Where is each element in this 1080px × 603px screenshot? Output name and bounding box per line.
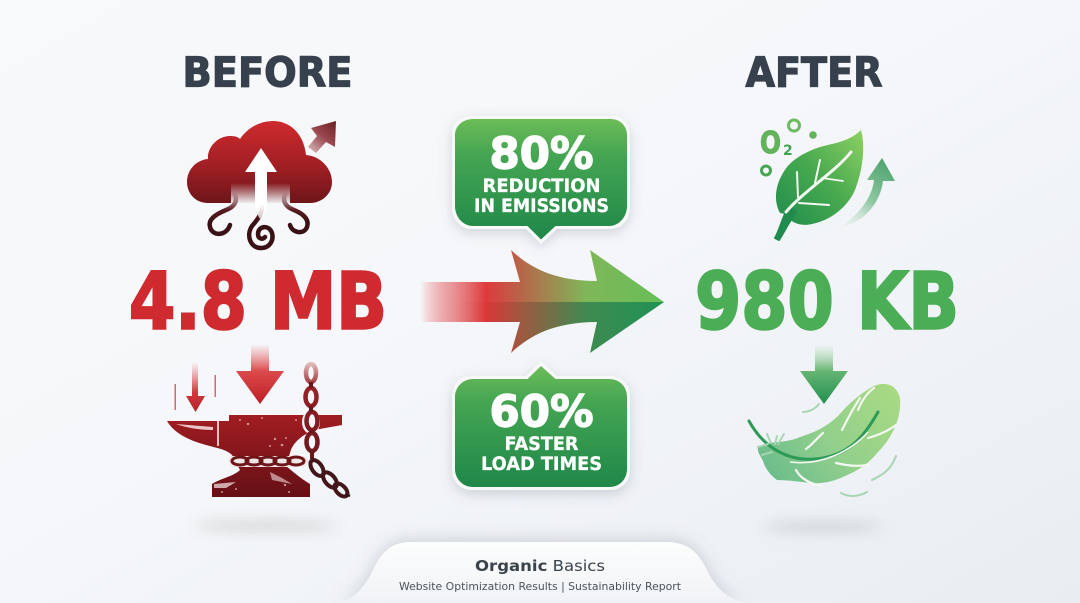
main transformation arrow (420, 250, 664, 353)
callout: 60% faster load times: FASTER (504, 433, 579, 455)
footer subtitle: Website Optimization Results | Sustainability Report (399, 581, 681, 593)
callout: 80% reduction in emissions (452, 116, 630, 244)
footer panel (338, 542, 745, 603)
value: 4.8 MB: 4.8 MB (129, 258, 387, 348)
icon: diagonal upward arrow (308, 121, 336, 153)
callout: 60% faster load times: LOAD TIMES (481, 453, 602, 475)
callout: 60% faster load times (452, 361, 630, 490)
footer brand: Organic Basics: Organic Basics (475, 557, 605, 575)
ground shadow: anvil (194, 522, 338, 530)
callout: 60% faster load times: 60% (490, 386, 594, 438)
icon: red cloud with upload arrow and tentacles (187, 121, 332, 248)
icon: green leaf (775, 130, 863, 240)
icon: green curved up arrow (838, 158, 895, 228)
heading: BEFORE: BEFORE (182, 48, 352, 96)
ground shadow: feather (763, 523, 883, 531)
icon: O2 bubbles: 2 (783, 143, 793, 159)
callout: 80% reduction in emissions: IN EMISSIONS (474, 195, 609, 217)
icon: heavy anvil with chains and down arrows (167, 345, 350, 499)
callout: 80% reduction in emissions: 80% (490, 128, 594, 180)
icon: O2 bubbles: O (760, 126, 781, 161)
icon: O2 bubbles (760, 120, 817, 175)
heading: AFTER: AFTER (746, 48, 882, 96)
callout: 80% reduction in emissions: REDUCTION (482, 175, 600, 197)
value: 980 KB: 980 KB (695, 258, 959, 348)
icon: light feather with down arrow (749, 345, 900, 496)
